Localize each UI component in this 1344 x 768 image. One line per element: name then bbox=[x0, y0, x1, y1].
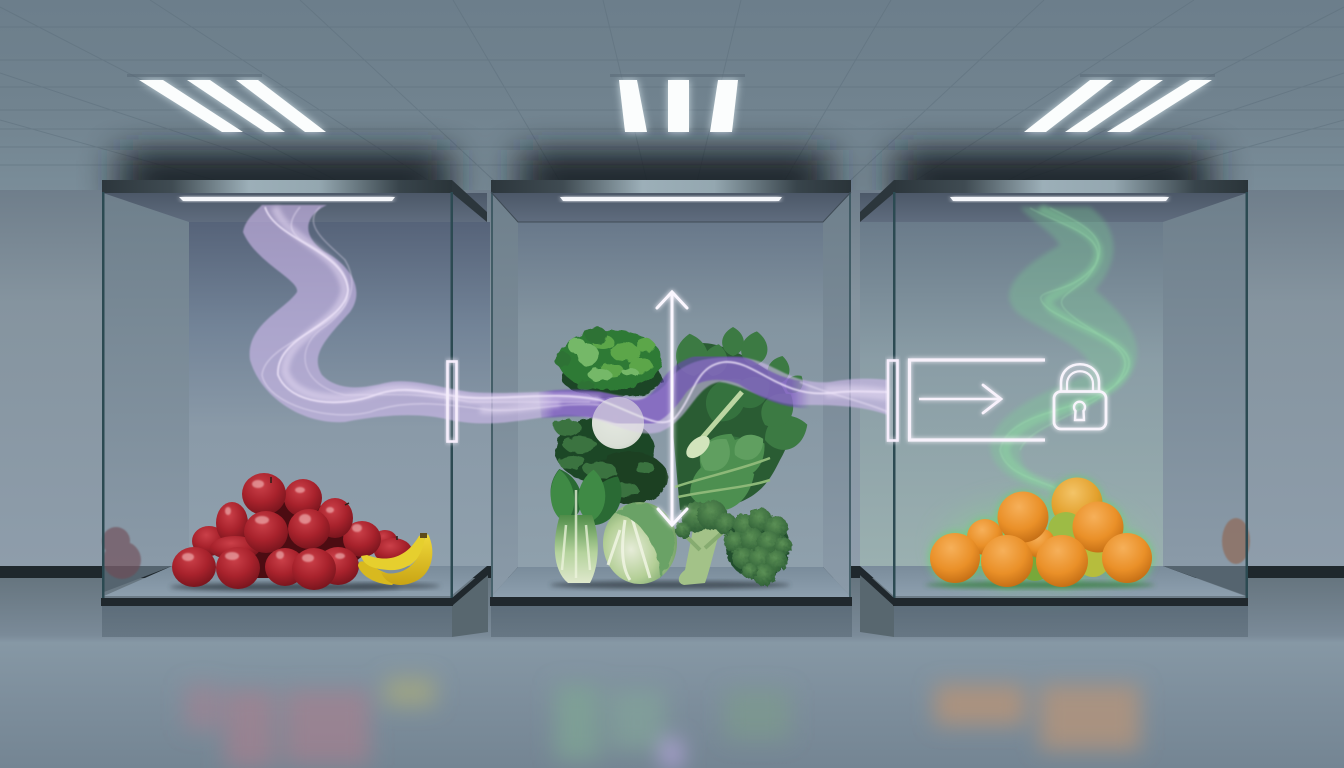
panel: right case bbox=[860, 180, 1250, 637]
reflected apples bbox=[102, 527, 141, 579]
green glow behind oranges bbox=[929, 477, 1153, 590]
light: left bbox=[139, 80, 326, 132]
broccoli stem bbox=[675, 500, 737, 585]
case light bbox=[950, 197, 1169, 201]
fruit: apples bbox=[170, 473, 440, 591]
case light bbox=[179, 197, 395, 201]
icon: padlock bbox=[1054, 364, 1106, 429]
green ribbon bbox=[990, 207, 1137, 490]
band over vegetables bbox=[540, 366, 810, 414]
purple vapour ribbon bbox=[243, 205, 888, 449]
ceiling lights bbox=[127, 74, 1215, 132]
glass frame bbox=[101, 180, 488, 606]
plinth bbox=[491, 606, 852, 637]
case light bbox=[560, 197, 782, 201]
greens: left dark leaves bbox=[555, 416, 668, 504]
back wall bbox=[0, 190, 1344, 566]
glass frame bbox=[490, 180, 852, 606]
ceiling shadows above cases bbox=[120, 150, 1210, 210]
light: centre bbox=[619, 80, 738, 132]
soft strands bbox=[275, 207, 888, 410]
reflected orange bbox=[1222, 518, 1250, 564]
broccoli head bbox=[724, 508, 792, 586]
panel: centre case bbox=[490, 180, 852, 637]
fruit: oranges bbox=[925, 478, 1155, 588]
panel: left case bbox=[101, 180, 490, 637]
greens: right leaf mass bbox=[672, 327, 813, 519]
icon: left gate bar bbox=[448, 362, 456, 442]
lettuce bbox=[555, 327, 662, 398]
light: right bbox=[1024, 80, 1212, 132]
floor reflections bbox=[185, 678, 1140, 768]
icon: vertical double arrow bbox=[657, 292, 687, 525]
glass frame bbox=[860, 180, 1248, 606]
cauliflower head bbox=[592, 397, 644, 449]
floor bbox=[0, 578, 1344, 768]
ceiling bbox=[0, 0, 1344, 192]
plinth bbox=[860, 575, 1248, 637]
bok choy bbox=[545, 465, 631, 583]
ribbon body bbox=[243, 205, 888, 433]
bright strands bbox=[262, 207, 888, 422]
cauliflower front highlight bbox=[592, 397, 644, 449]
plinth bbox=[102, 575, 488, 637]
icon: bracket with arrow bbox=[910, 360, 1045, 440]
icon: right gate bar bbox=[888, 360, 898, 440]
vegetables bbox=[545, 327, 813, 589]
skirting bbox=[0, 566, 1344, 578]
fruit: bananas bbox=[358, 533, 432, 585]
cabbage bbox=[603, 502, 677, 584]
